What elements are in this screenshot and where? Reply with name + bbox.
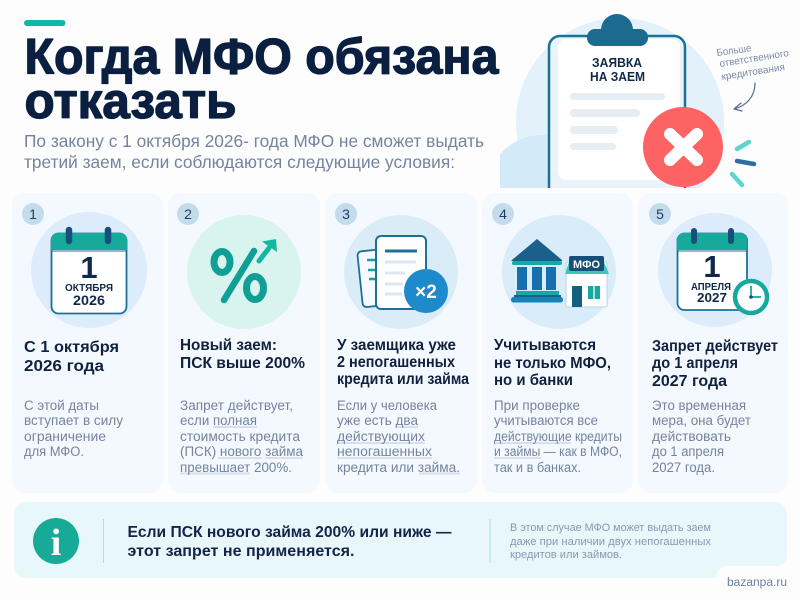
number badge 4 [492,203,514,225]
note: more responsible lending: Больше [716,43,752,59]
number badge 1: 1 [29,206,37,222]
number badge 5 [649,203,671,225]
card 3 text: действующих [337,429,425,444]
icon: calendar 1 April 2027 with clock: 2027 [697,290,727,305]
callout side note [510,522,712,561]
title [24,28,500,129]
card 5 heading: Запрет действует [652,338,778,355]
icon: bank and MFO office [502,215,616,329]
callout main text: этот запрет не применяется. [128,543,354,560]
arrow [734,83,755,111]
card 2 text: превышает 200%. [180,460,292,475]
card 4 text: учитываются все [494,413,598,428]
icon: bank and MFO office: МФО [573,259,600,271]
icon: percent with arrow [187,215,301,329]
icon: calendar 1 April 2027 with clock: АПРЕЛЯ [691,282,731,293]
card 5 text: действовать [652,429,731,444]
card 1 text: ограничение [24,429,106,444]
card 2 heading: Новый заем: [180,337,277,354]
card 4 text: так и в банках. [494,460,581,475]
form heading [590,58,644,81]
icon: calendar 1 October 2026 [31,212,147,328]
card 2 text: (ПСК) нового займа [180,444,303,459]
card 3 text: Если у человека [337,398,437,413]
accent bar [24,20,66,26]
card 1 text: С этой даты [24,398,99,413]
card 5 heading [652,338,778,390]
subtitle: По закону с 1 октября 2026- года МФО не сможет выдать [24,131,484,151]
panel: card 5 [638,193,788,493]
card 1 text: для МФО. [24,444,84,459]
card 1 heading: 2026 года [24,358,104,375]
icon: calendar 1 April 2027 with clock [658,213,772,327]
card 3 text: уже есть два [337,413,418,428]
card 5 text: мера, она будет [652,413,751,428]
card 4 heading: но и банки [494,372,573,389]
card 1 heading [24,339,119,375]
card 2 text: Запрет действует, [180,398,293,413]
note: more responsible lending [716,43,790,83]
card 5 text: 2027 года. [652,460,715,475]
number badge 1 [22,203,44,225]
callout main text: Если ПСК нового займа 200% или ниже — [128,524,452,541]
card 1 text: вступает в силу [24,413,123,428]
card 4 text: действующие кредиты [494,429,622,444]
card 5 text [652,398,751,475]
note: more responsible lending: кредитования [721,62,786,83]
illustration: clipboard with rejected application [500,14,724,188]
card 4 text: и займы — как в МФО, [494,444,622,459]
title: Когда МФО обязана [24,28,500,84]
icon: red cross [643,107,723,187]
card 4 text: При проверке [494,398,580,413]
icon: info: i [51,522,61,564]
card 2 text: стоимость кредита [180,429,300,444]
card 4 heading: Учитываются [494,337,596,354]
card 3 text: кредита или займа. [337,460,460,475]
card 2 text [180,398,303,475]
form lines [570,93,665,150]
icon: info [33,518,79,564]
icon: two documents x2: ×2 [415,282,437,303]
card 3 heading: У заемщика уже [337,337,456,354]
card 3 heading: 2 непогашенных [337,354,455,371]
note: more responsible lending: ответственного [719,48,790,70]
card 4 heading [494,337,611,389]
callout main text [128,524,452,560]
sparks [732,142,754,185]
card 5 text: до 1 апреля [652,444,724,459]
card 2 text: если полная [180,413,257,428]
panel: card 2 [168,193,320,493]
source: bazanpa.ru [727,577,787,589]
card 3 text: непогашенных [337,444,432,459]
card 4 heading: не только МФО, [494,355,611,372]
subtitle: третий заем, если соблюдаются следующие условия: [24,152,455,172]
callout side note: даже при наличии двух непогашенных [510,536,712,548]
title: отказать [24,73,236,129]
icon: calendar 1 October 2026: 1 [80,250,98,285]
card 1 heading: С 1 октября [24,339,119,356]
panel: card 1 [12,193,163,493]
panel: card 4 [482,193,633,493]
panel: card 3 [325,193,477,493]
icon: calendar 1 October 2026: ОКТЯБРЯ [65,283,113,294]
number badge 2: 2 [184,206,192,222]
number badge 5: 5 [656,206,664,222]
number badge 2 [177,203,199,225]
form heading: ЗАЯВКА [592,56,642,70]
number badge 3: 3 [342,206,350,222]
card 1 text [24,398,123,459]
card 3 text [337,398,460,475]
card 5 text: Это временная [652,398,746,413]
subtitle [24,131,484,172]
icon: calendar 1 April 2027 with clock: 1 [703,249,721,284]
icon: calendar 1 October 2026: 2026 [73,293,106,308]
card 5 heading: до 1 апреля [652,355,738,372]
card 5 heading: 2027 года [652,373,727,390]
icon: two documents x2 [344,215,458,329]
callout side note: В этом случае МФО может выдать заем [510,522,711,534]
card 2 heading [180,337,305,372]
panel: bottom callout [14,502,787,578]
form heading: НА ЗАЕМ [590,70,645,84]
number badge 3 [335,203,357,225]
card 4 text [494,398,622,475]
callout side note: кредитов или займов. [510,549,622,561]
card 3 heading: кредита или займа [337,371,469,388]
clipboard clip [587,14,648,46]
number badge 4: 4 [499,206,507,222]
card 3 heading [337,337,469,388]
card 2 heading: ПСК выше 200% [180,355,305,372]
